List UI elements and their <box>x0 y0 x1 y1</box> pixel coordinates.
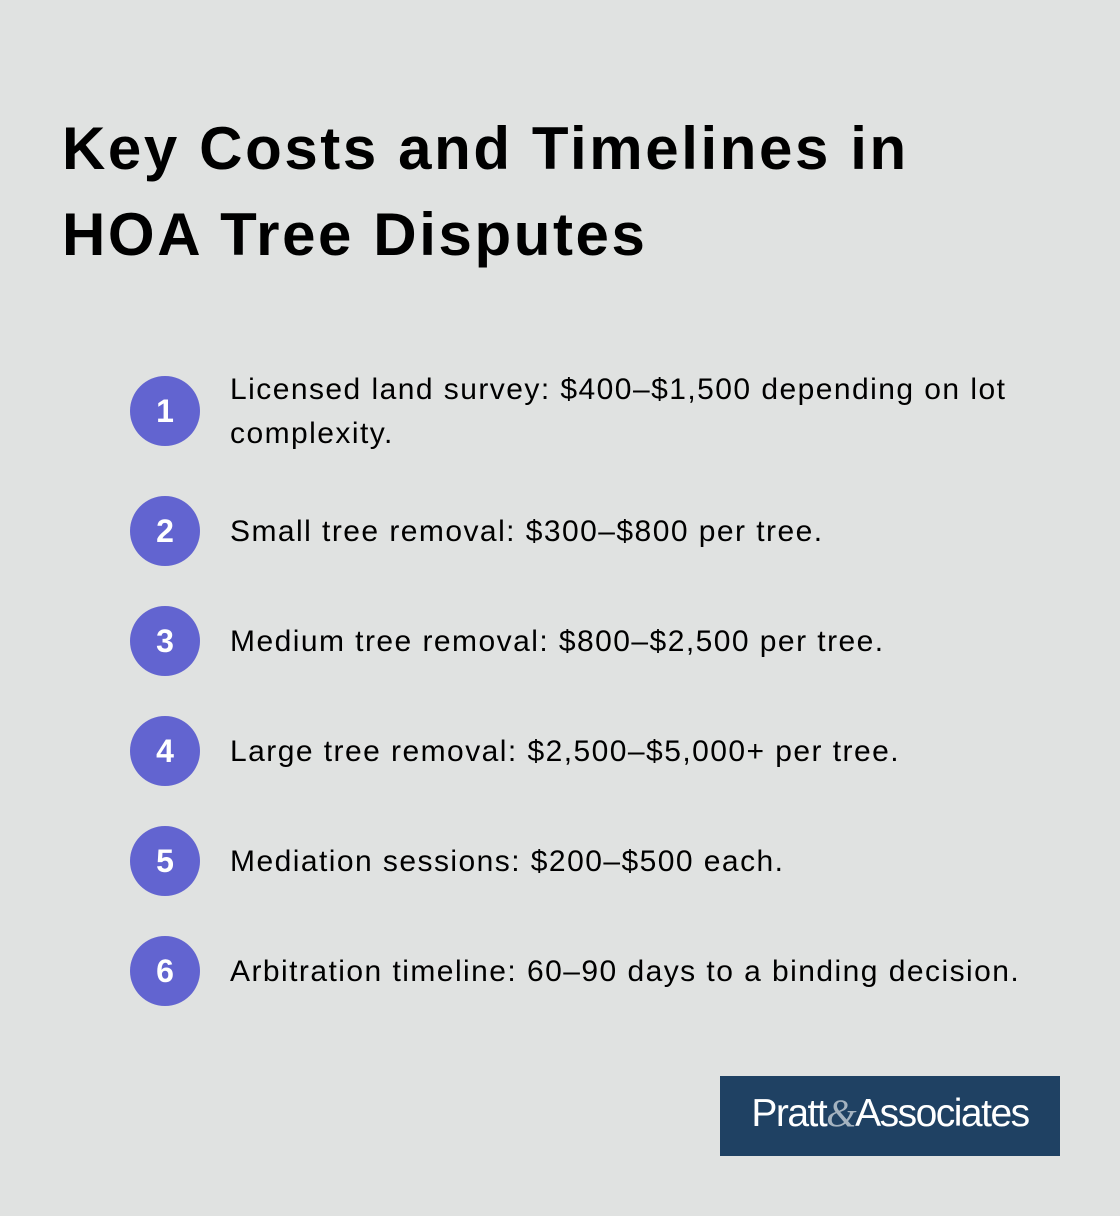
title <box>62 115 909 268</box>
text 2: Small tree removal: $300–$800 per tree. <box>230 515 824 548</box>
title: HOA Tree Disputes <box>62 201 647 268</box>
badge 1 <box>130 376 200 446</box>
badge 5 <box>130 826 200 896</box>
badge 5: 5 <box>156 843 174 879</box>
badge 4 <box>130 716 200 786</box>
badge 4: 4 <box>156 733 174 769</box>
badge 2 <box>130 496 200 566</box>
item 1 <box>130 373 1006 450</box>
text 1: Licensed land survey: $400–$1,500 depending on lot complexity. <box>230 373 1006 450</box>
badge 3 <box>130 606 200 676</box>
item 4 <box>130 716 900 786</box>
logo: Pratt&Associates <box>751 1092 1029 1135</box>
badge 2: 2 <box>156 513 174 549</box>
title: Key Costs and Timelines in <box>62 115 909 182</box>
item 6 <box>130 936 1020 1006</box>
item 5 <box>130 826 784 896</box>
item 3 <box>130 606 885 676</box>
badge 1: 1 <box>156 393 174 429</box>
badge 6: 6 <box>156 953 174 989</box>
text 4: Large tree removal: $2,500–$5,000+ per tree. <box>230 735 900 768</box>
item 2 <box>130 496 824 566</box>
text 6: Arbitration timeline: 60–90 days to a binding decision. <box>230 955 1020 988</box>
text 5: Mediation sessions: $200–$500 each. <box>230 845 784 878</box>
badge 3: 3 <box>156 623 174 659</box>
badge 6 <box>130 936 200 1006</box>
logo <box>720 1076 1060 1156</box>
text 3: Medium tree removal: $800–$2,500 per tree. <box>230 625 885 658</box>
